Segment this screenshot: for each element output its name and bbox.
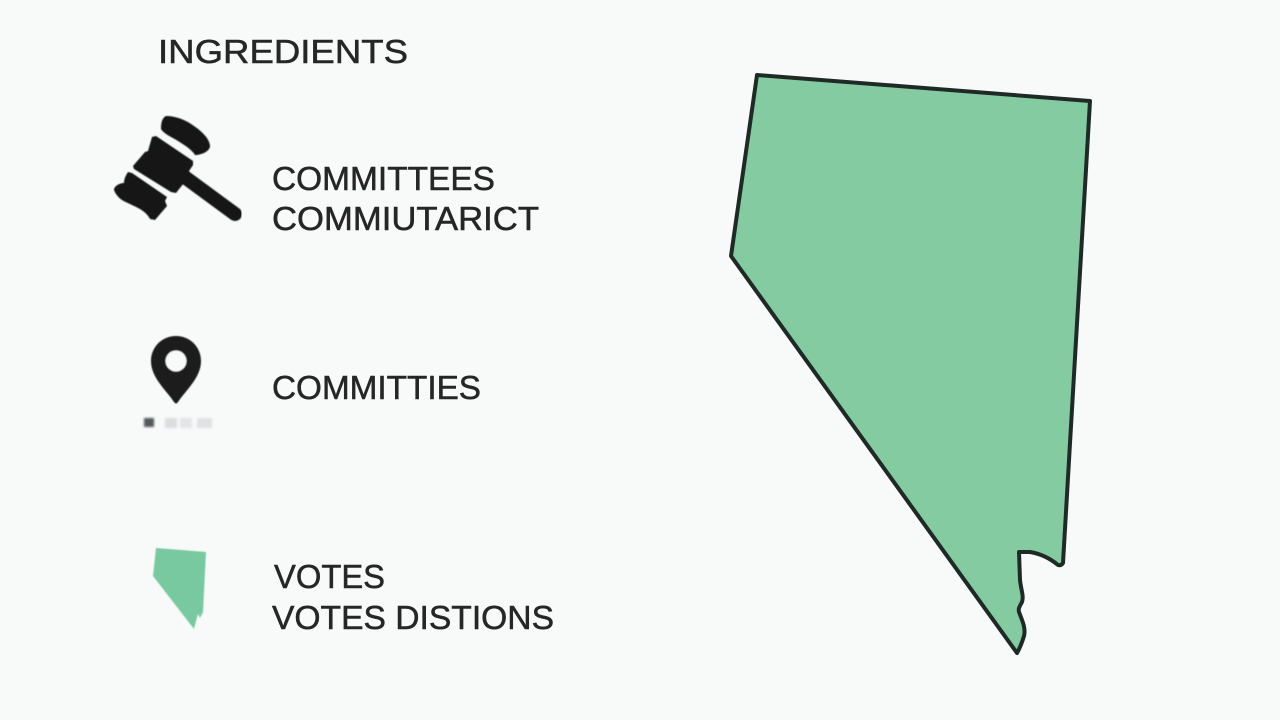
text: committies label: COMMITTIES xyxy=(272,369,481,406)
text: votes label: VOTES xyxy=(274,558,385,595)
text: votes label xyxy=(272,558,554,636)
icon: gavel xyxy=(114,116,235,220)
text: committees label: COMMIUTARICT xyxy=(272,200,539,237)
text: committees label xyxy=(272,160,539,237)
title: INGREDIENTS xyxy=(158,33,408,70)
map: Nevada shape xyxy=(731,75,1090,653)
text: votes label: VOTES DISTIONS xyxy=(272,599,554,636)
icon caption: blurred mark xyxy=(144,418,212,428)
icon: small Nevada shape xyxy=(153,548,206,629)
icon: map pin xyxy=(151,336,201,404)
text: committees label: COMMITTEES xyxy=(272,160,495,197)
